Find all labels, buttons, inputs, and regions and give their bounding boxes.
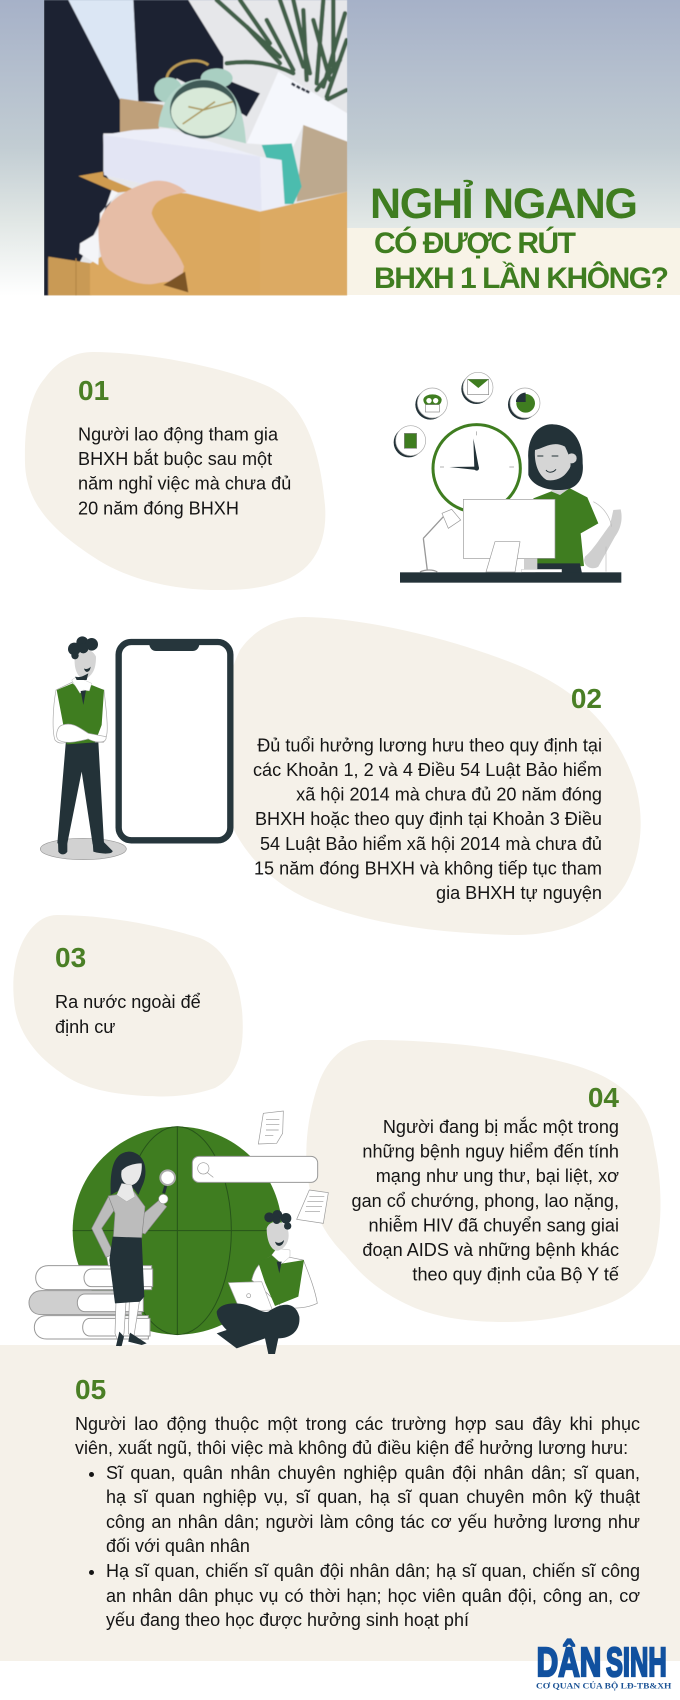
lamp: [420, 517, 443, 572]
search bar: [192, 1156, 318, 1182]
illustration: globe search with two people and books: [29, 1111, 328, 1354]
panel: section 05: [0, 1345, 680, 1661]
panel: section 02: BHXH hoặc theo quy định tại Khoản 3 Điều: [255, 809, 602, 829]
panel: section 04: theo quy định của Bộ Y tế: [412, 1265, 619, 1285]
panel: section 02: 54 Luật Bảo hiểm xã hội 2014 mà chưa đủ: [260, 834, 602, 854]
icon: people: [415, 388, 447, 420]
panel: section 01: năm nghỉ việc mà chưa đủ: [78, 474, 291, 494]
panel: section 01: [25, 352, 325, 590]
header background: [0, 0, 680, 296]
panel: section 04: những bệnh nguy hiểm đến tính: [362, 1142, 619, 1162]
panel: section 01: Người lao động tham gia: [78, 424, 279, 444]
text block: section 05 body: Người lao động thuộc một trong các trường hợp sau đây khi phục: [75, 1414, 640, 1434]
panel: section 04: đoạn AIDS và những bệnh khác: [362, 1240, 619, 1260]
panel: section 02: 02: [571, 683, 602, 714]
title: [370, 179, 669, 295]
text block: section 05 body: đối với quân nhân: [106, 1536, 250, 1556]
books: [29, 1266, 153, 1339]
panel: section 01: 20 năm đóng BHXH: [78, 498, 239, 518]
paper 1: [258, 1111, 283, 1144]
logo: Dân Sinh: CƠ QUAN CỦA BỘ LĐ-TB&XH: [536, 1681, 672, 1691]
text block: section 05 body: [75, 1414, 640, 1630]
title: CÓ ĐƯỢC RÚT: [374, 226, 576, 260]
panel: section 01: BHXH bắt buộc sau một: [78, 448, 272, 469]
panel: section 03: 03: [55, 942, 86, 973]
woman: [92, 1152, 175, 1346]
man with laptop: [217, 1210, 317, 1354]
globe: [73, 1127, 282, 1335]
panel: section 03: định cư: [55, 1017, 115, 1037]
title: NGHỈ NGANG: [370, 179, 638, 228]
panel: section 04: gan cổ chướng, phong, lao nặng,: [352, 1191, 619, 1211]
desk: [400, 572, 621, 583]
text block: section 05 body: yếu đang theo học được hưởng sinh hoạt phí: [106, 1610, 469, 1630]
panel: section 02: Đủ tuổi hưởng lương hưu theo quy định tại: [257, 736, 602, 756]
text block: section 05 body: viên, xuất ngũ, thôi việc mà không đủ điều kiện để hưởng lương hưu:: [75, 1438, 628, 1458]
icon: book: [394, 426, 426, 457]
title band: [347, 228, 680, 295]
panel: section 03: Ra nước ngoài để: [55, 992, 201, 1012]
panel: section 04: mạng như ung thư, bại liệt, xơ: [376, 1166, 619, 1186]
panel: section 04: 04: [588, 1082, 619, 1113]
icon: mail: [461, 372, 493, 404]
illustration: man beside a phone: [40, 636, 230, 860]
title: BHXH 1 LẦN KHÔNG?: [374, 261, 669, 295]
paper 2: [297, 1190, 328, 1223]
phone: [119, 642, 230, 840]
panel: section 02: 15 năm đóng BHXH và không tiếp tục tham: [254, 858, 602, 878]
panel: section 04: nhiễm HIV đã chuyển sang giai: [369, 1214, 619, 1235]
text block: section 05 body: an nhân dân phục vụ có thời hạn; học viên quân đội, công an, cơ: [106, 1586, 640, 1606]
logo: Dân Sinh: [536, 1639, 672, 1691]
icon: pie chart: [508, 388, 540, 420]
panel: section 02: xã hội 2014 mà chưa đủ 20 năm đóng: [296, 785, 602, 805]
panel: section 02: [219, 617, 641, 935]
photo: hands holding a cardboard box: [44, 0, 347, 296]
panel: section 04: [306, 1040, 661, 1322]
illustration: woman at computer with clock: [394, 372, 622, 583]
text block: section 05 body: Sĩ quan, quân nhân chuyên nghiệp quân đội nhân dân; sĩ quan,: [106, 1463, 640, 1483]
number: section 05: 05: [75, 1374, 106, 1405]
panel: section 01: 01: [78, 375, 109, 406]
panel: section 04: Người đang bị mắc một trong: [383, 1116, 619, 1137]
panel: section 02: các Khoản 1, 2 và 4 Điều 54 Luật Bảo hiểm: [253, 760, 602, 780]
panel: section 02: gia BHXH tự nguyện: [436, 883, 602, 903]
text block: section 05 body: công an nhân dân; người làm công tác cơ yếu hưởng lương như: [106, 1512, 640, 1532]
panel: section 03: [13, 915, 243, 1096]
text block: section 05 body: Hạ sĩ quan, chiến sĩ quân đội nhân dân; hạ sĩ quan, chiến sĩ công: [106, 1561, 640, 1581]
text block: section 05 body: hạ sĩ quan nghiệp vụ, sĩ quan, hạ sĩ quan chuyên môn kỹ thuật: [106, 1487, 640, 1507]
logo: Dân Sinh: DÂN: [537, 1639, 601, 1685]
